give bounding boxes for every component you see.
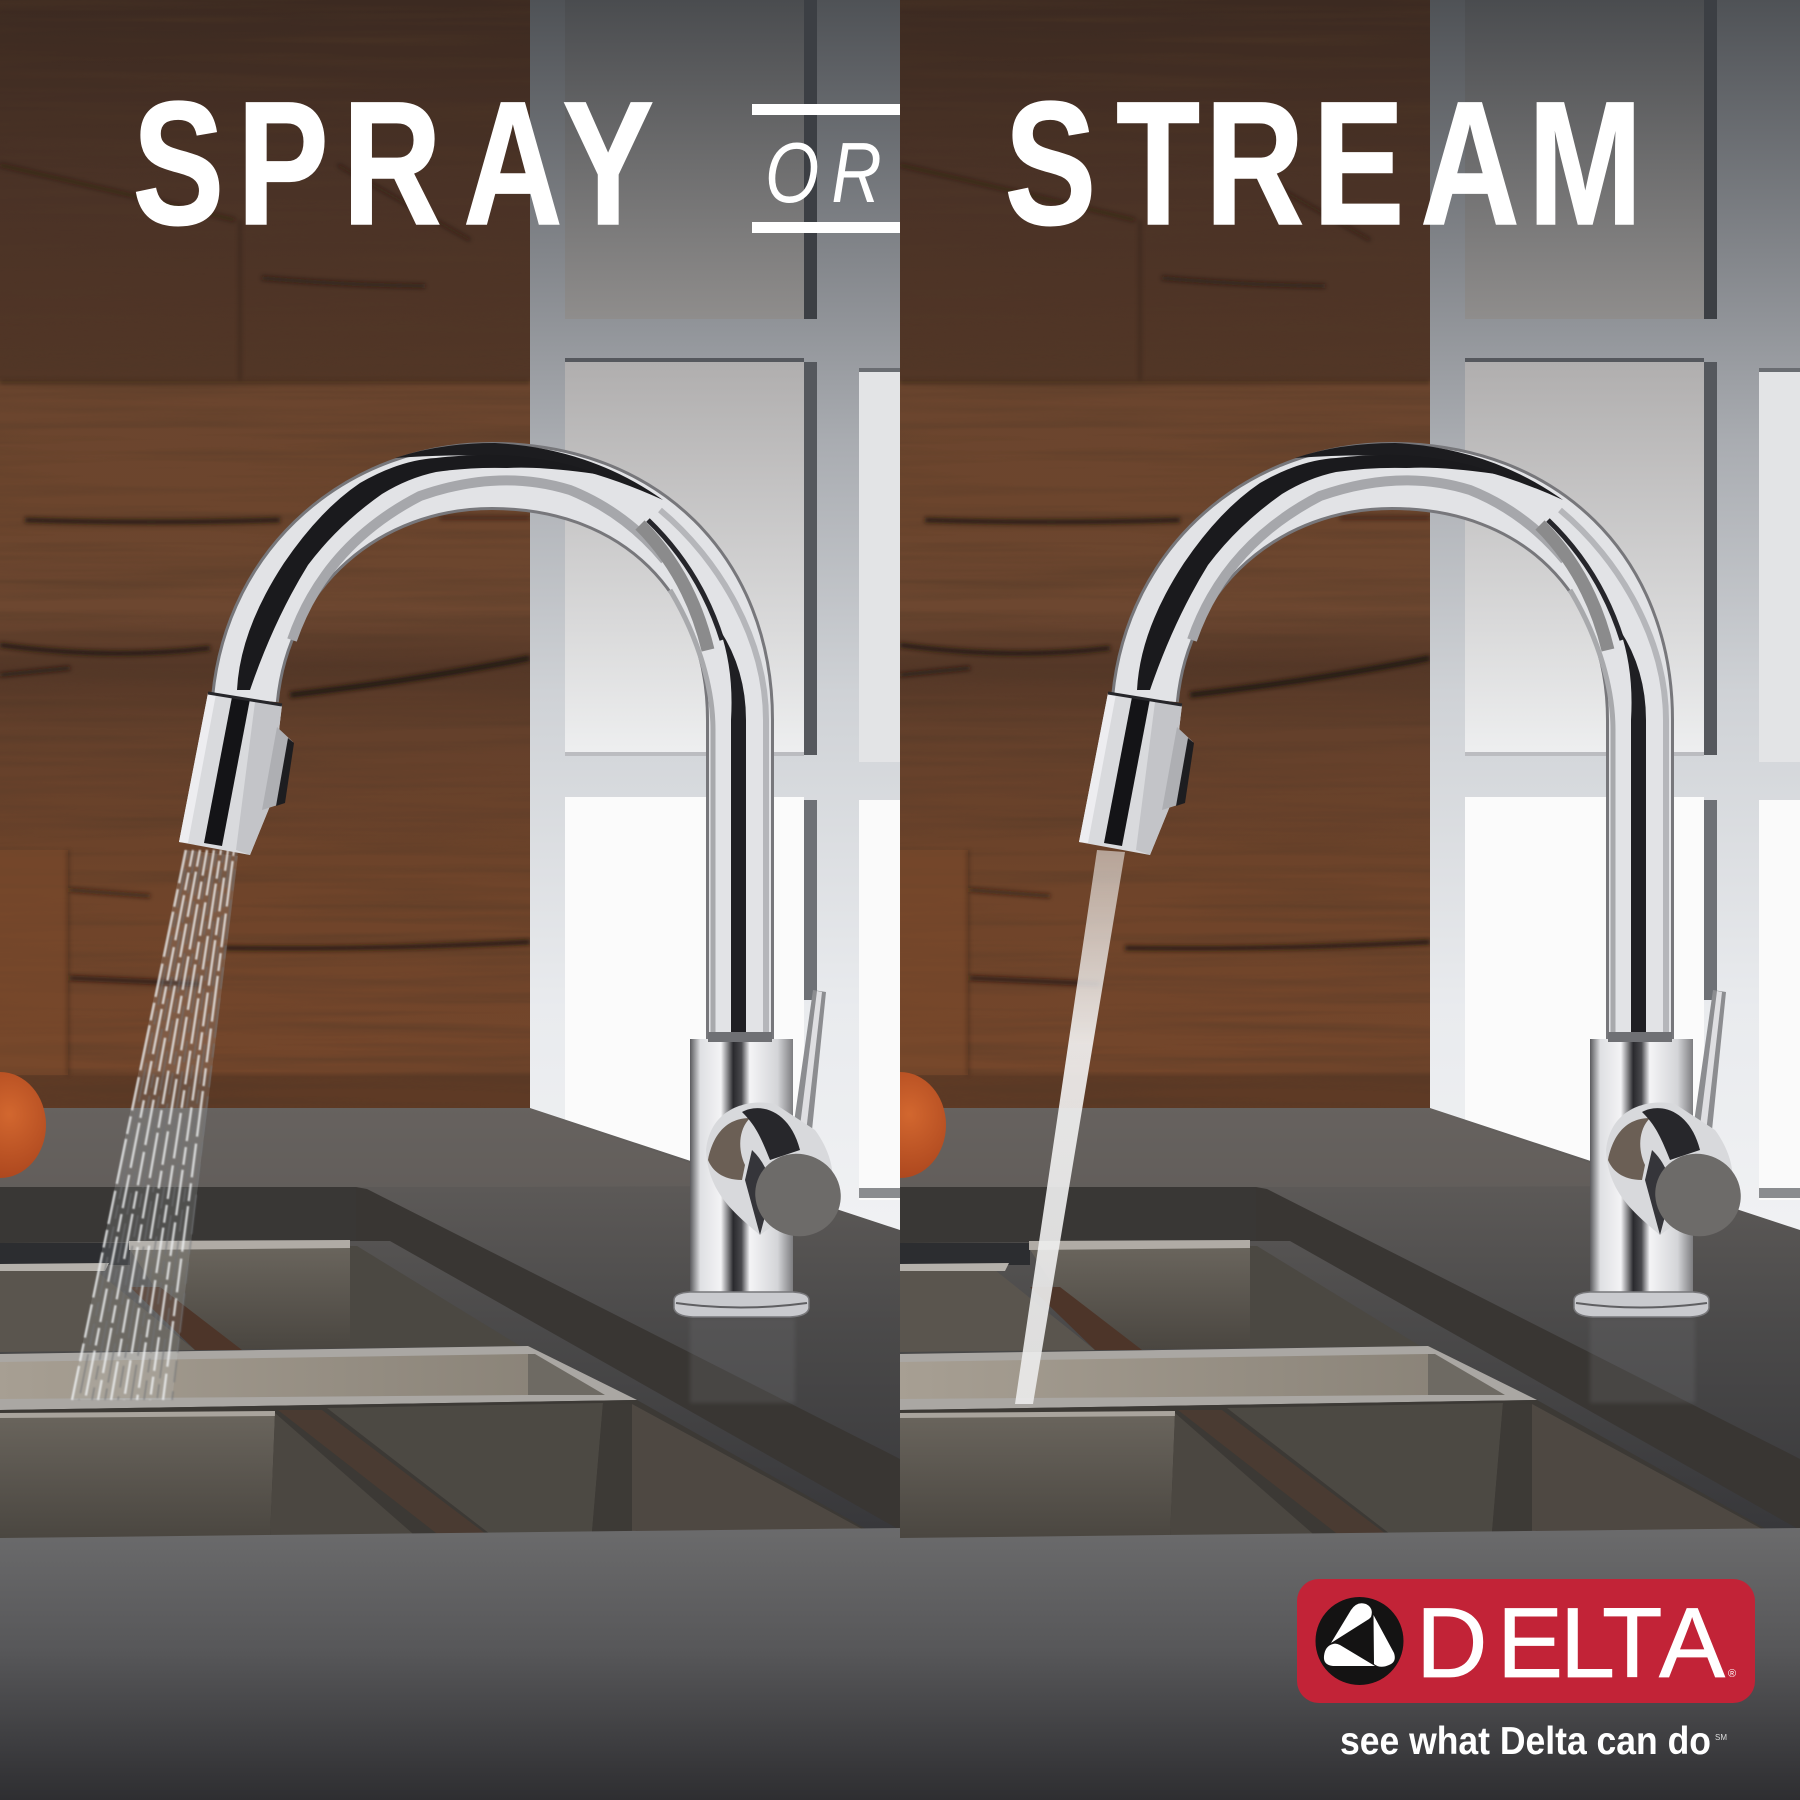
faucet spout and base bbox=[237, 443, 809, 1317]
logo red badge bbox=[1297, 1579, 1755, 1703]
faucet spout and base bbox=[1137, 443, 1709, 1317]
panel: stream scene bbox=[854, 0, 1800, 1800]
faucet handle bbox=[1606, 990, 1741, 1236]
spray water bbox=[71, 850, 238, 1400]
heading: OR with rules: OR bbox=[765, 127, 882, 221]
kitchen background: wood wall, window, counter, sink bbox=[900, 0, 1800, 1800]
stream water bbox=[1015, 850, 1125, 1404]
Delta logo bbox=[1297, 1579, 1755, 1703]
kitchen background: wood wall, window, counter, sink bbox=[0, 0, 900, 1800]
registered mark: ® bbox=[1728, 1668, 1736, 1680]
icon: orange fruit bbox=[900, 1072, 946, 1178]
heading: STREAM: STREAM bbox=[1005, 66, 1642, 262]
icon: Delta emblem bbox=[1316, 1597, 1404, 1685]
heading: OR with rules bbox=[752, 104, 900, 233]
heading: SPRAY: SPRAY bbox=[133, 66, 654, 262]
pull-down spray head bbox=[179, 693, 294, 855]
faucet handle bbox=[706, 990, 841, 1236]
tagline: see what Delta can do bbox=[1340, 1720, 1711, 1763]
logo wordmark: DELTA bbox=[1416, 1587, 1725, 1698]
pull-down spray head bbox=[1079, 693, 1194, 855]
service mark: SM bbox=[1715, 1733, 1727, 1742]
panel: spray scene bbox=[0, 0, 900, 1800]
icon: orange fruit bbox=[0, 1072, 46, 1178]
